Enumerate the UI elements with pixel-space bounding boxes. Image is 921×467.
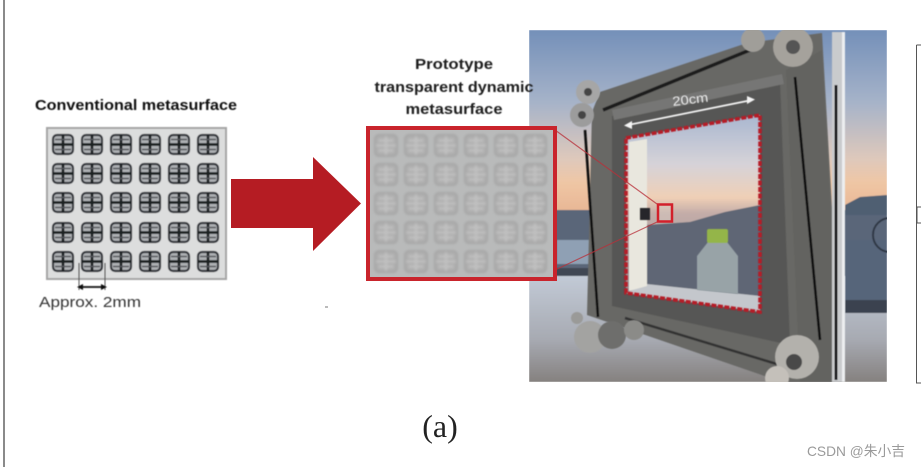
heading: prototype transparent dynamic metasurface: transparent dynamic [374, 80, 534, 96]
bottle [697, 229, 738, 294]
window view through metasurface [626, 115, 760, 312]
dimension arrow: 20cm: 20cm [672, 90, 709, 109]
gears [570, 27, 819, 390]
arrow: conventional to prototype [231, 157, 361, 251]
panel: photo of prototype [529, 27, 907, 390]
panel: prototype metasurface zoomed [368, 128, 555, 279]
heading: conventional metasurface: Conventional metasurface [35, 98, 237, 114]
small speck [325, 306, 328, 308]
dimension arrow: 20cm [624, 94, 756, 130]
heading: prototype transparent dynamic metasurface: metasurface [406, 102, 502, 118]
photo background [529, 30, 907, 382]
zoom guide lines [555, 130, 657, 270]
watermark: CSDN @朱小吉 [807, 443, 905, 459]
heading: prototype transparent dynamic metasurface [374, 57, 534, 118]
small sample on glass [640, 208, 650, 220]
dimension marker: 2mm [77, 263, 107, 290]
panel: conventional metasurface grid [47, 128, 226, 279]
heading: prototype transparent dynamic metasurface: Prototype [415, 57, 493, 73]
left page border [3, 0, 5, 467]
red zoom box on sample [658, 204, 672, 222]
caption: (a): (a) [422, 408, 458, 444]
right edge bracket [916, 45, 921, 383]
label: approx 2mm: Approx. 2mm [39, 295, 141, 311]
metal frame [585, 32, 845, 382]
dashed red outline of metasurface [626, 115, 760, 312]
